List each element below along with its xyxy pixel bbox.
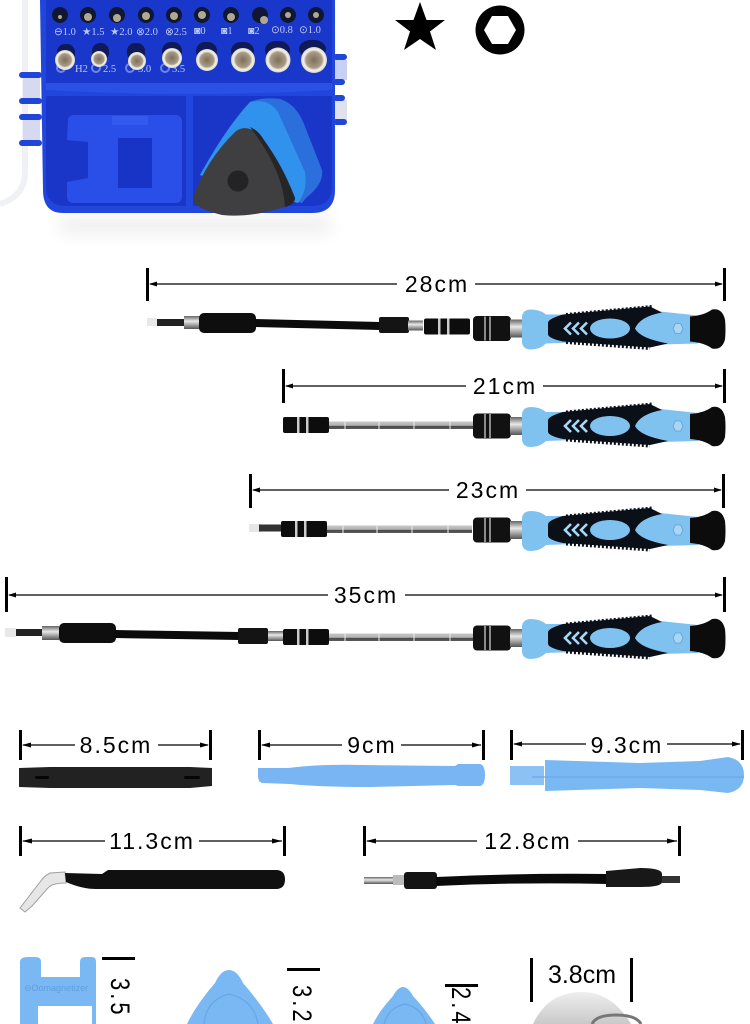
socket size labels (75, 64, 185, 75)
tray ridge (46, 83, 332, 94)
bit size labels: ⊙0.8 (271, 25, 293, 36)
dimension: 9cm (258, 730, 485, 760)
dimension: 28cm: 28cm (405, 271, 469, 297)
dimension: 21cm: 21cm (473, 373, 537, 399)
clear plastic side (0, 0, 25, 204)
tool: black pry bar (19, 767, 212, 788)
dimension: 3.8cm: 3.8cm (548, 961, 616, 989)
dimension: 3.2cm: 3.2 (286, 985, 316, 1024)
bit size labels: ★1.5 (82, 27, 105, 38)
dimension: 3.2cm (286, 968, 320, 1024)
blue pry picks (200, 98, 322, 203)
bit size labels: ⊗2.0 (136, 27, 158, 38)
dimension: 3.8cm (530, 958, 633, 1002)
sockets (55, 47, 327, 73)
tool: small blue triangle pick (373, 987, 435, 1024)
flex shaft (199, 313, 256, 333)
bit size labels: ⊗2.5 (165, 27, 187, 38)
dimension: 23cm (249, 474, 725, 508)
tool: blue magnetizer (20, 957, 96, 1024)
right clips (333, 54, 347, 125)
dimension: 28cm (146, 268, 726, 301)
tool: flex shaft extension (364, 868, 680, 889)
magnetizer block (67, 115, 182, 203)
left compartment (46, 96, 186, 206)
tool: suction cup with ring (533, 992, 641, 1024)
dimension: 21cm (282, 369, 726, 403)
tool: bent tweezers (20, 870, 285, 912)
socket size labels: 3.5 (172, 64, 185, 75)
dimension: 8.5cm (19, 730, 212, 760)
socket size labels: H2 (75, 64, 88, 75)
dimension: 9cm: 9cm (347, 732, 397, 758)
dimension: 12.8cm: 12.8cm (484, 828, 572, 854)
socket size labels: 3.0 (138, 64, 151, 75)
dimension: 9.3cm: 9.3cm (591, 732, 663, 758)
screwdriver 3: blade with plain shaft (249, 508, 726, 551)
dimension: 11.3cm: 11.3cm (109, 828, 195, 854)
case body (40, 0, 335, 213)
dimension: 8.5cm: 8.5cm (80, 732, 152, 758)
bit size labels: ◙0 (194, 26, 206, 37)
tool: large blue triangle pick (187, 970, 273, 1024)
dimension: 3.5cm: 3.5 (104, 978, 134, 1018)
tool: blue pry bar (258, 764, 485, 787)
right compartment (193, 96, 332, 206)
case shadow (60, 216, 330, 234)
icon: star bit symbol (395, 2, 445, 50)
top row bits (52, 7, 324, 23)
socket rings (57, 64, 169, 72)
bit size labels: ◙2 (248, 26, 260, 37)
dimension: 12.8cm (363, 826, 681, 856)
dimension: 9.3cm (510, 730, 744, 760)
socket size labels: 2.5 (103, 64, 116, 75)
upper bit tray (46, 0, 332, 83)
handle (473, 306, 726, 350)
screwdriver 4: flex shaft and plain shaft (5, 616, 726, 659)
bit size labels: ⊙1.0 (299, 25, 321, 36)
flathead tip (147, 318, 157, 326)
screwdriver 1: flex shaft with blade (147, 306, 726, 350)
black pry pick (193, 127, 295, 216)
product case: bit tray and accessories (0, 0, 347, 234)
bit size labels: ⊖1.0 (54, 27, 76, 38)
bit size labels (54, 25, 321, 38)
tool: blue spudger (510, 757, 744, 793)
bit size labels: ◙1 (221, 26, 233, 37)
dimension: 3.5cm (102, 957, 135, 1018)
dimension: 35cm: 35cm (334, 582, 398, 608)
left clips (19, 72, 42, 146)
tool: blue magnetizer: ⊖Oomagnetizer (24, 983, 88, 993)
dimension: 35cm (5, 577, 726, 612)
bit tips (58, 11, 319, 24)
socket bodies (57, 40, 326, 62)
dimension: 23cm: 23cm (456, 477, 520, 503)
screwdriver 2: plain shaft (283, 404, 726, 447)
icon: hex socket symbol (476, 6, 524, 54)
bit size labels: ★2.0 (110, 27, 133, 38)
dimension: 11.3cm (19, 826, 286, 856)
